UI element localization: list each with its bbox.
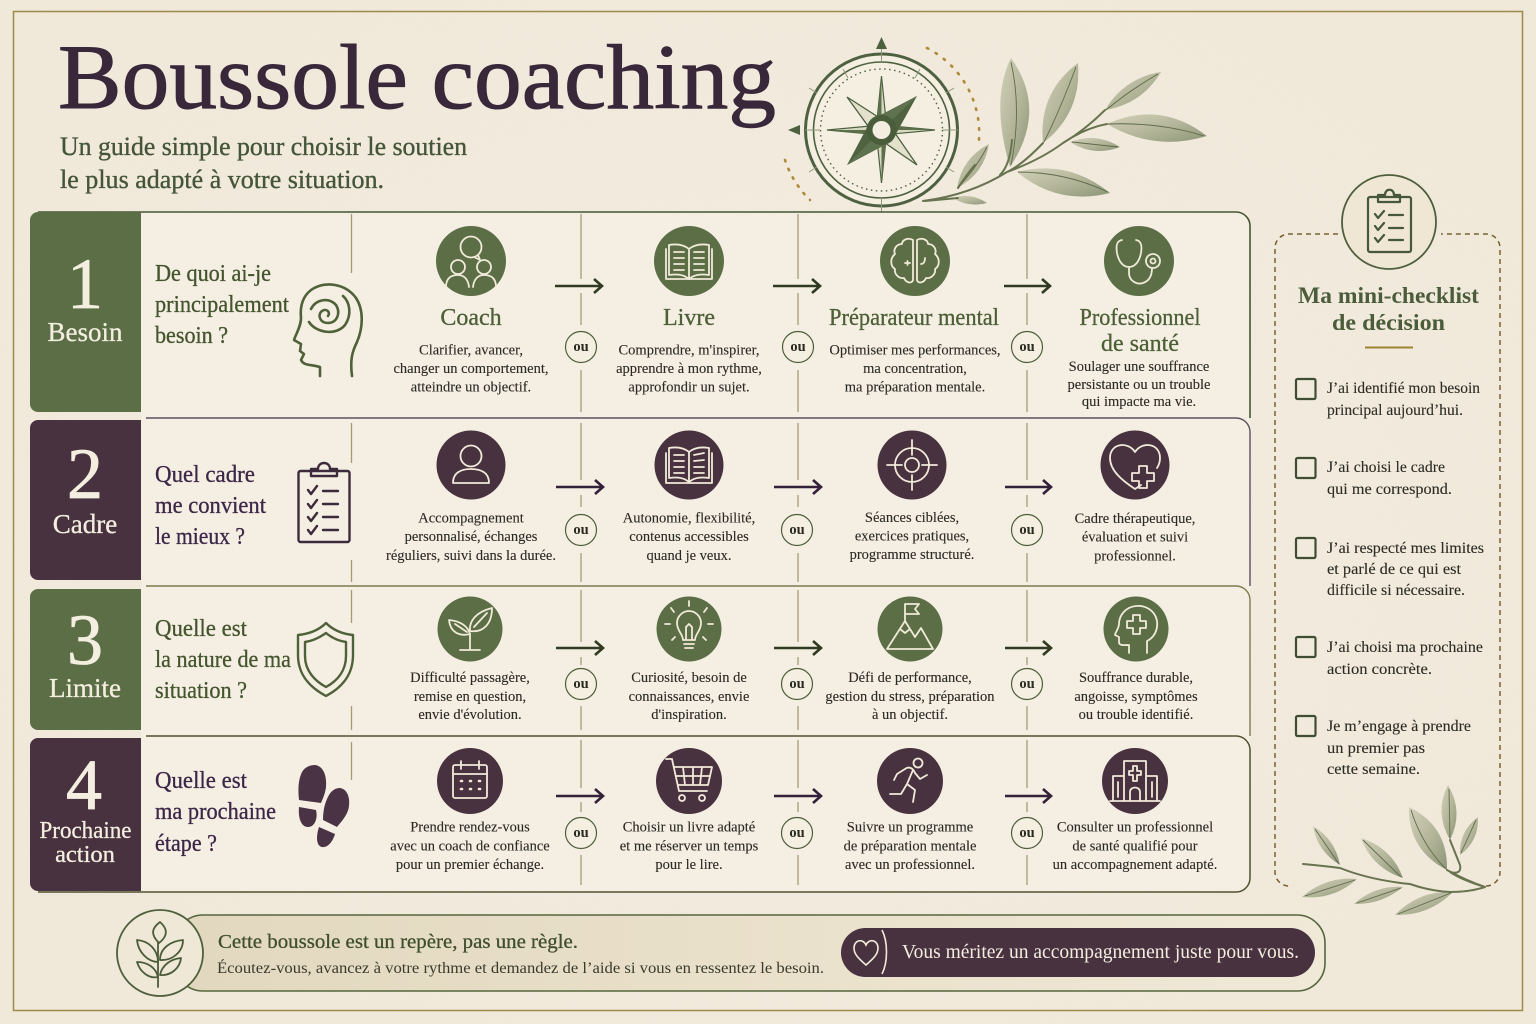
choisir un livre option: pour le lire. (655, 857, 723, 873)
row 1 question: principalement (155, 292, 289, 318)
row 2: cadre header: Cadre (53, 509, 117, 539)
cadre thérapeutique option: professionnel. (1094, 548, 1176, 564)
checklist item 4: J’ai choisi ma prochaine (1327, 639, 1483, 656)
préparateur mental option: ma préparation mentale. (845, 380, 985, 396)
checklist item 2: J’ai choisi le cadre (1327, 459, 1445, 476)
row 1: besoin header (30, 212, 141, 412)
checklist heading: Ma mini-checklist (1298, 283, 1479, 309)
choisir un livre option: Choisir un livre adapté (623, 820, 755, 836)
livre option: Comprendre, m'inspirer, (619, 342, 759, 358)
row 3 dividers (352, 590, 1027, 730)
row 2 dividers (352, 423, 1027, 582)
row 2 ou badges: ou (573, 522, 589, 538)
row 3 question: la nature de ma (155, 647, 291, 673)
autonomie option: contenus accessibles (629, 529, 749, 545)
livre option (616, 226, 762, 396)
checklist item 5: un premier pas (1327, 740, 1425, 757)
curiosité option (629, 596, 749, 723)
row 4 ou badges: ou (573, 825, 589, 841)
curiosité option: d'inspiration. (651, 707, 727, 723)
souffrance option: ou trouble identifié. (1079, 707, 1193, 723)
rendez-vous option: avec un coach de confiance (390, 838, 550, 854)
row 4 dividers (352, 740, 1027, 885)
checklist item 5 (1296, 716, 1471, 778)
row 1 arrows (555, 279, 1050, 293)
rendez-vous option: pour un premier échange. (396, 857, 544, 873)
row 4 question (155, 768, 276, 857)
row 2 ou badges (566, 514, 1042, 546)
row 4: prochaine action header: Prochaine (40, 817, 132, 844)
row 2 question: me convient (155, 493, 266, 519)
checklist item 2 (1296, 458, 1452, 498)
cadre thérapeutique option (1075, 430, 1195, 564)
préparateur mental option (829, 226, 1001, 396)
souffrance option (1074, 596, 1198, 723)
séances ciblées option: Séances ciblées, (865, 510, 959, 526)
professionnel de santé option: persistante ou un trouble (1068, 377, 1210, 393)
difficulté option: remise en question, (414, 689, 526, 705)
programme option: de préparation mentale (844, 838, 976, 854)
accompagnement option (386, 430, 556, 564)
cadre thérapeutique option: évaluation et suivi (1082, 530, 1188, 546)
professionnel de santé option: Professionnel (1080, 305, 1201, 331)
choisir un livre option: et me réserver un temps (620, 838, 759, 854)
callout text (217, 931, 824, 977)
icon: footprints (298, 765, 349, 847)
icon: head spiral (294, 284, 362, 376)
livre option: Livre (663, 305, 715, 331)
difficulté option (410, 596, 530, 723)
row 4: prochaine action header (30, 738, 141, 891)
souffrance option: angoisse, symptômes (1074, 689, 1198, 705)
row 1 question: besoin ? (155, 323, 228, 349)
consulter option: Consulter un professionnel (1057, 820, 1213, 836)
coach option (393, 226, 549, 396)
row 4 question: Quelle est (155, 768, 247, 794)
subtitle: Un guide simple pour choisir le soutien (60, 132, 467, 161)
callout pill (841, 928, 1315, 977)
row 1 question: De quoi ai-je (155, 261, 271, 287)
row 1 ou badges: ou (1019, 339, 1035, 355)
callout: bottom message (117, 910, 1325, 996)
coach option: Clarifier, avancer, (419, 342, 523, 358)
row 1 question (155, 261, 289, 349)
programme option (844, 748, 976, 873)
défi option: gestion du stress, préparation (825, 689, 995, 705)
consulter option: un accompagnement adapté. (1053, 857, 1217, 873)
subtitle: le plus adapté à votre situation. (60, 165, 384, 194)
professionnel de santé option: de santé (1101, 331, 1179, 357)
row 3 question: situation ? (155, 678, 247, 704)
défi option: Défi de performance, (848, 670, 972, 686)
checklist item 3 (1296, 538, 1484, 599)
programme option: Suivre un programme (847, 820, 973, 836)
row 1 ou badges (566, 332, 1042, 362)
défi option: à un objectif. (872, 707, 948, 723)
row 3: limite header (30, 589, 141, 730)
checklist item 1: J’ai identifié mon besoin (1327, 380, 1480, 397)
row 3 ou badges: ou (1019, 676, 1035, 692)
row 1 ou badges: ou (573, 339, 589, 355)
checklist item 5: cette semaine. (1327, 761, 1420, 778)
checklist item 5: Je m’engage à prendre (1327, 718, 1471, 735)
row 3 ou badges (566, 668, 1042, 700)
row 4 ou badges: ou (789, 825, 805, 841)
row 2 ou badges: ou (789, 522, 805, 538)
illustration: olive branch top (923, 58, 1207, 205)
row 4 question: ma prochaine (155, 799, 276, 825)
défi option (825, 596, 995, 723)
row 2 question: le mieux ? (155, 524, 245, 550)
illustration: olive branch bottom (1302, 785, 1485, 915)
autonomie option (623, 430, 755, 564)
curiosité option: connaissances, envie (629, 689, 749, 705)
préparateur mental option: Optimiser mes performances, (829, 342, 1001, 358)
checklist item 1 (1296, 379, 1480, 419)
rendez-vous option: Prendre rendez-vous (410, 820, 530, 836)
row 4: prochaine action header: 4 (66, 745, 102, 825)
checklist item 1: principal aujourd’hui. (1327, 402, 1463, 419)
callout pill: Vous méritez un accompagnement juste pour vous. (902, 941, 1299, 963)
row 3 ou badges: ou (789, 676, 805, 692)
professionnel de santé option (1068, 226, 1210, 410)
row 3 ou badges: ou (573, 676, 589, 692)
curiosité option: Curiosité, besoin de (631, 670, 747, 686)
accompagnement option: Accompagnement (418, 510, 524, 526)
programme option: avec un professionnel. (845, 857, 975, 873)
row 1: besoin header: 1 (67, 244, 103, 324)
choisir un livre option (620, 748, 759, 873)
autonomie option: quand je veux. (647, 548, 731, 564)
checklist heading: de décision (1332, 310, 1445, 336)
difficulté option: envie d'évolution. (418, 707, 522, 723)
row 2: cadre header (30, 420, 141, 580)
subtitle (60, 132, 467, 194)
checklist item 3: et parlé de ce qui est (1327, 561, 1462, 578)
checklist item 4: action concrète. (1327, 661, 1432, 678)
coach option: atteindre un objectif. (411, 380, 531, 396)
souffrance option: Souffrance durable, (1079, 670, 1193, 686)
row 2 question (155, 462, 266, 550)
icon: clipboard badge (1342, 175, 1436, 269)
row 1: besoin header: Besoin (47, 317, 123, 347)
row 3 question: Quelle est (155, 616, 247, 642)
checklist heading (1298, 283, 1479, 336)
row 4 ou badges: ou (1019, 825, 1035, 841)
row 1 ou badges: ou (790, 339, 806, 355)
livre option: approfondir un sujet. (628, 380, 750, 396)
icon: clipboard (298, 463, 350, 542)
coach option: changer un comportement, (393, 361, 549, 377)
icon: shield (298, 623, 353, 696)
row 2 arrows (556, 480, 1051, 494)
icon: compass (785, 37, 979, 213)
checklist item 4 (1296, 637, 1483, 678)
autonomie option: Autonomie, flexibilité, (623, 510, 755, 526)
consulter option: de santé qualifié pour (1072, 838, 1198, 854)
row 4 arrows (556, 789, 1051, 803)
row 4 question: étape ? (155, 831, 217, 857)
panel: mini-checklist (1275, 175, 1500, 915)
row 2 ou badges: ou (1019, 522, 1035, 538)
row 4: prochaine action header: action (55, 841, 115, 868)
rendez-vous option (390, 748, 550, 873)
row 3: limite header: Limite (49, 673, 121, 703)
callout text: Écoutez-vous, avancez à votre rythme et demandez de l’aide si vous en ressentez le besoin. (217, 958, 824, 977)
row 1 dividers (352, 214, 1027, 412)
icon: sprout badge (117, 910, 203, 996)
checklist item 3: difficile si nécessaire. (1327, 582, 1465, 599)
row 2: cadre header: 2 (67, 434, 103, 514)
row 2 question: Quel cadre (155, 462, 255, 488)
difficulté option: Difficulté passagère, (410, 670, 530, 686)
livre option: apprendre à mon rythme, (616, 361, 762, 377)
panel: decision table (30, 212, 1250, 892)
checklist item 2: qui me correspond. (1327, 481, 1452, 498)
icon: heart (854, 930, 886, 974)
séances ciblées option: exercices pratiques, (855, 528, 969, 544)
cadre thérapeutique option: Cadre thérapeutique, (1075, 511, 1195, 527)
préparateur mental option: ma concentration, (863, 361, 967, 377)
professionnel de santé option: qui impacte ma vie. (1082, 394, 1196, 410)
row 3 arrows (556, 641, 1051, 655)
préparateur mental option: Préparateur mental (829, 305, 999, 331)
title: Boussole coaching (58, 26, 776, 128)
professionnel de santé option: Soulager une souffrance (1069, 359, 1209, 375)
coach option: Coach (440, 305, 502, 331)
séances ciblées option (850, 430, 974, 563)
séances ciblées option: programme structuré. (850, 547, 974, 563)
callout text: Cette boussole est un repère, pas une règle. (218, 931, 578, 953)
accompagnement option: réguliers, suivi dans la durée. (386, 548, 556, 564)
consulter option (1053, 748, 1217, 873)
accompagnement option: personnalisé, échanges (405, 529, 538, 545)
row 3: limite header: 3 (67, 600, 103, 680)
checklist item 3: J’ai respecté mes limites (1327, 540, 1484, 557)
row 3 question (155, 616, 291, 704)
row 4 ou badges (566, 818, 1042, 848)
